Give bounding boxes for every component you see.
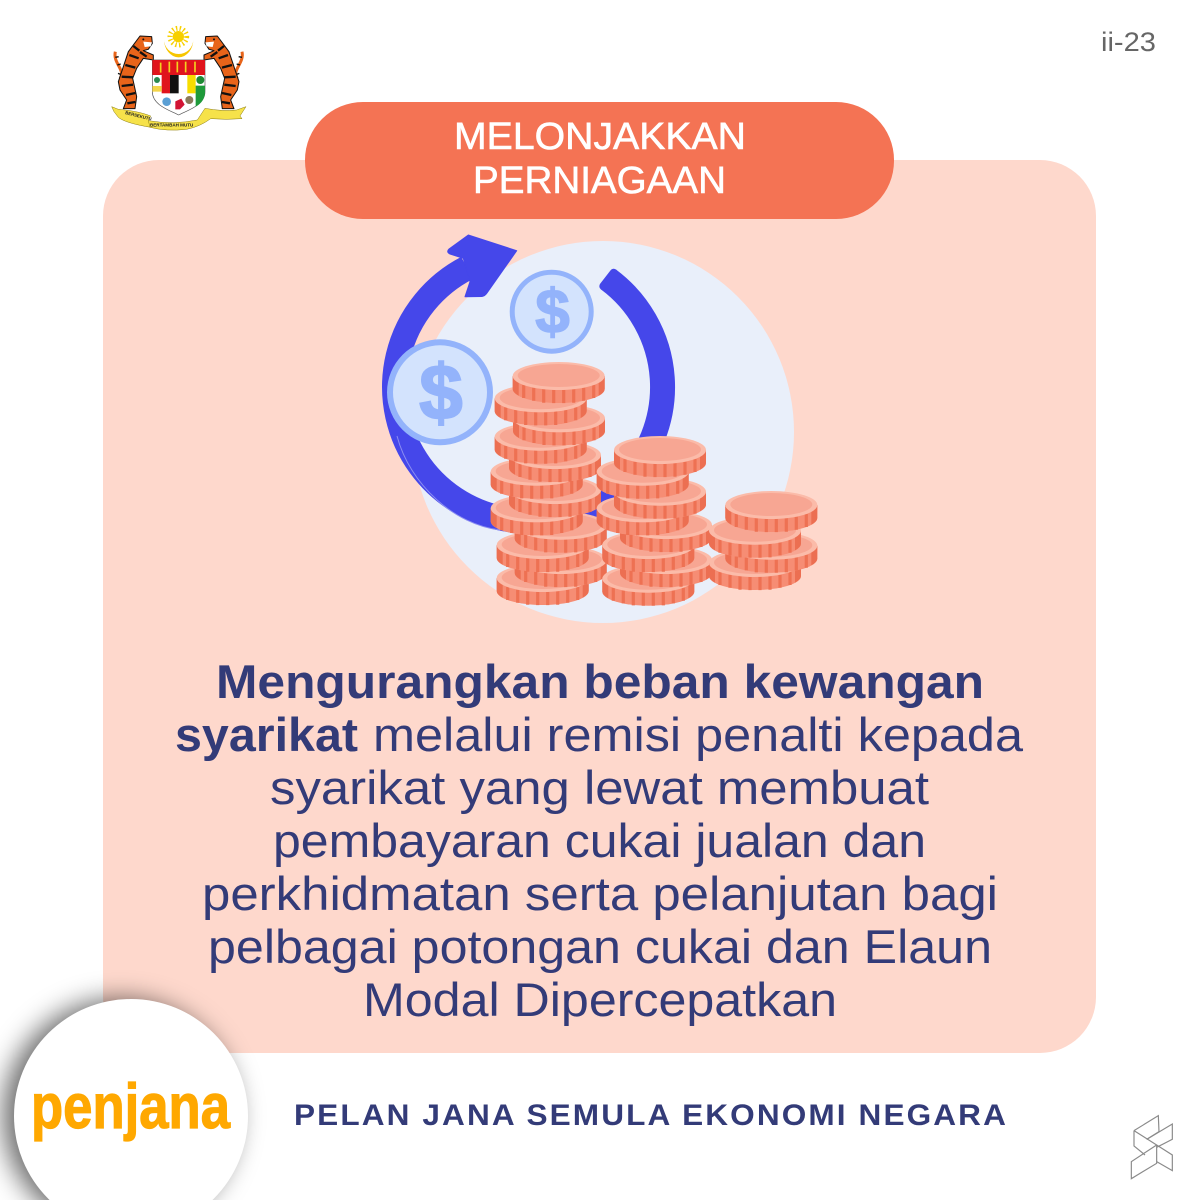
motto ribbon bbox=[112, 107, 246, 130]
shield bbox=[152, 60, 205, 115]
left tiger bbox=[115, 36, 153, 109]
large dollar coin bbox=[387, 339, 493, 445]
illustration: coins and growth cycle bbox=[387, 235, 817, 623]
heading pill bbox=[305, 102, 894, 219]
body text bbox=[175, 655, 1024, 1026]
body text: melalui remisi penalti kepada bbox=[373, 708, 1024, 761]
large dollar coin: $ bbox=[419, 348, 463, 436]
penjana wordmark: penjana bbox=[31, 1072, 231, 1142]
body text: syarikat bbox=[175, 708, 358, 761]
heading text: PERNIAGAAN bbox=[473, 160, 726, 202]
heading text: MELONJAKKAN bbox=[454, 116, 746, 158]
small dollar coin bbox=[510, 270, 594, 354]
body text: Modal Dipercepatkan bbox=[363, 973, 837, 1026]
heading text bbox=[454, 116, 746, 202]
body text: perkhidmatan serta pelanjutan bagi bbox=[202, 867, 998, 920]
sun and crescent bbox=[164, 28, 193, 57]
coin stack: tall bbox=[491, 362, 607, 605]
motto ribbon: BERSEKUTU bbox=[125, 110, 152, 121]
footer tagline: PELAN JANA SEMULA EKONOMI NEGARA bbox=[294, 1099, 1008, 1132]
panel: main background bbox=[103, 160, 1096, 1053]
body text: Mengurangkan beban kewangan bbox=[216, 655, 984, 708]
icon: Malaysian coat of arms bbox=[112, 28, 246, 130]
motto ribbon: BERTAMBAH MUTU bbox=[150, 123, 194, 128]
page number: ii-23 bbox=[1101, 27, 1156, 57]
right tiger bbox=[204, 36, 242, 109]
small dollar coin: $ bbox=[535, 278, 570, 347]
body text: pembayaran cukai jualan dan bbox=[273, 814, 926, 867]
circular arrow bbox=[395, 235, 663, 530]
penjana logo badge bbox=[3, 999, 248, 1200]
icon: corner logo mark bbox=[1131, 1116, 1172, 1179]
body text: syarikat yang lewat membuat bbox=[270, 761, 929, 814]
background circle bbox=[412, 241, 794, 623]
coin stack: short bbox=[709, 491, 817, 590]
body text: pelbagai potongan cukai dan Elaun bbox=[208, 920, 992, 973]
coin stack: medium bbox=[597, 436, 712, 606]
